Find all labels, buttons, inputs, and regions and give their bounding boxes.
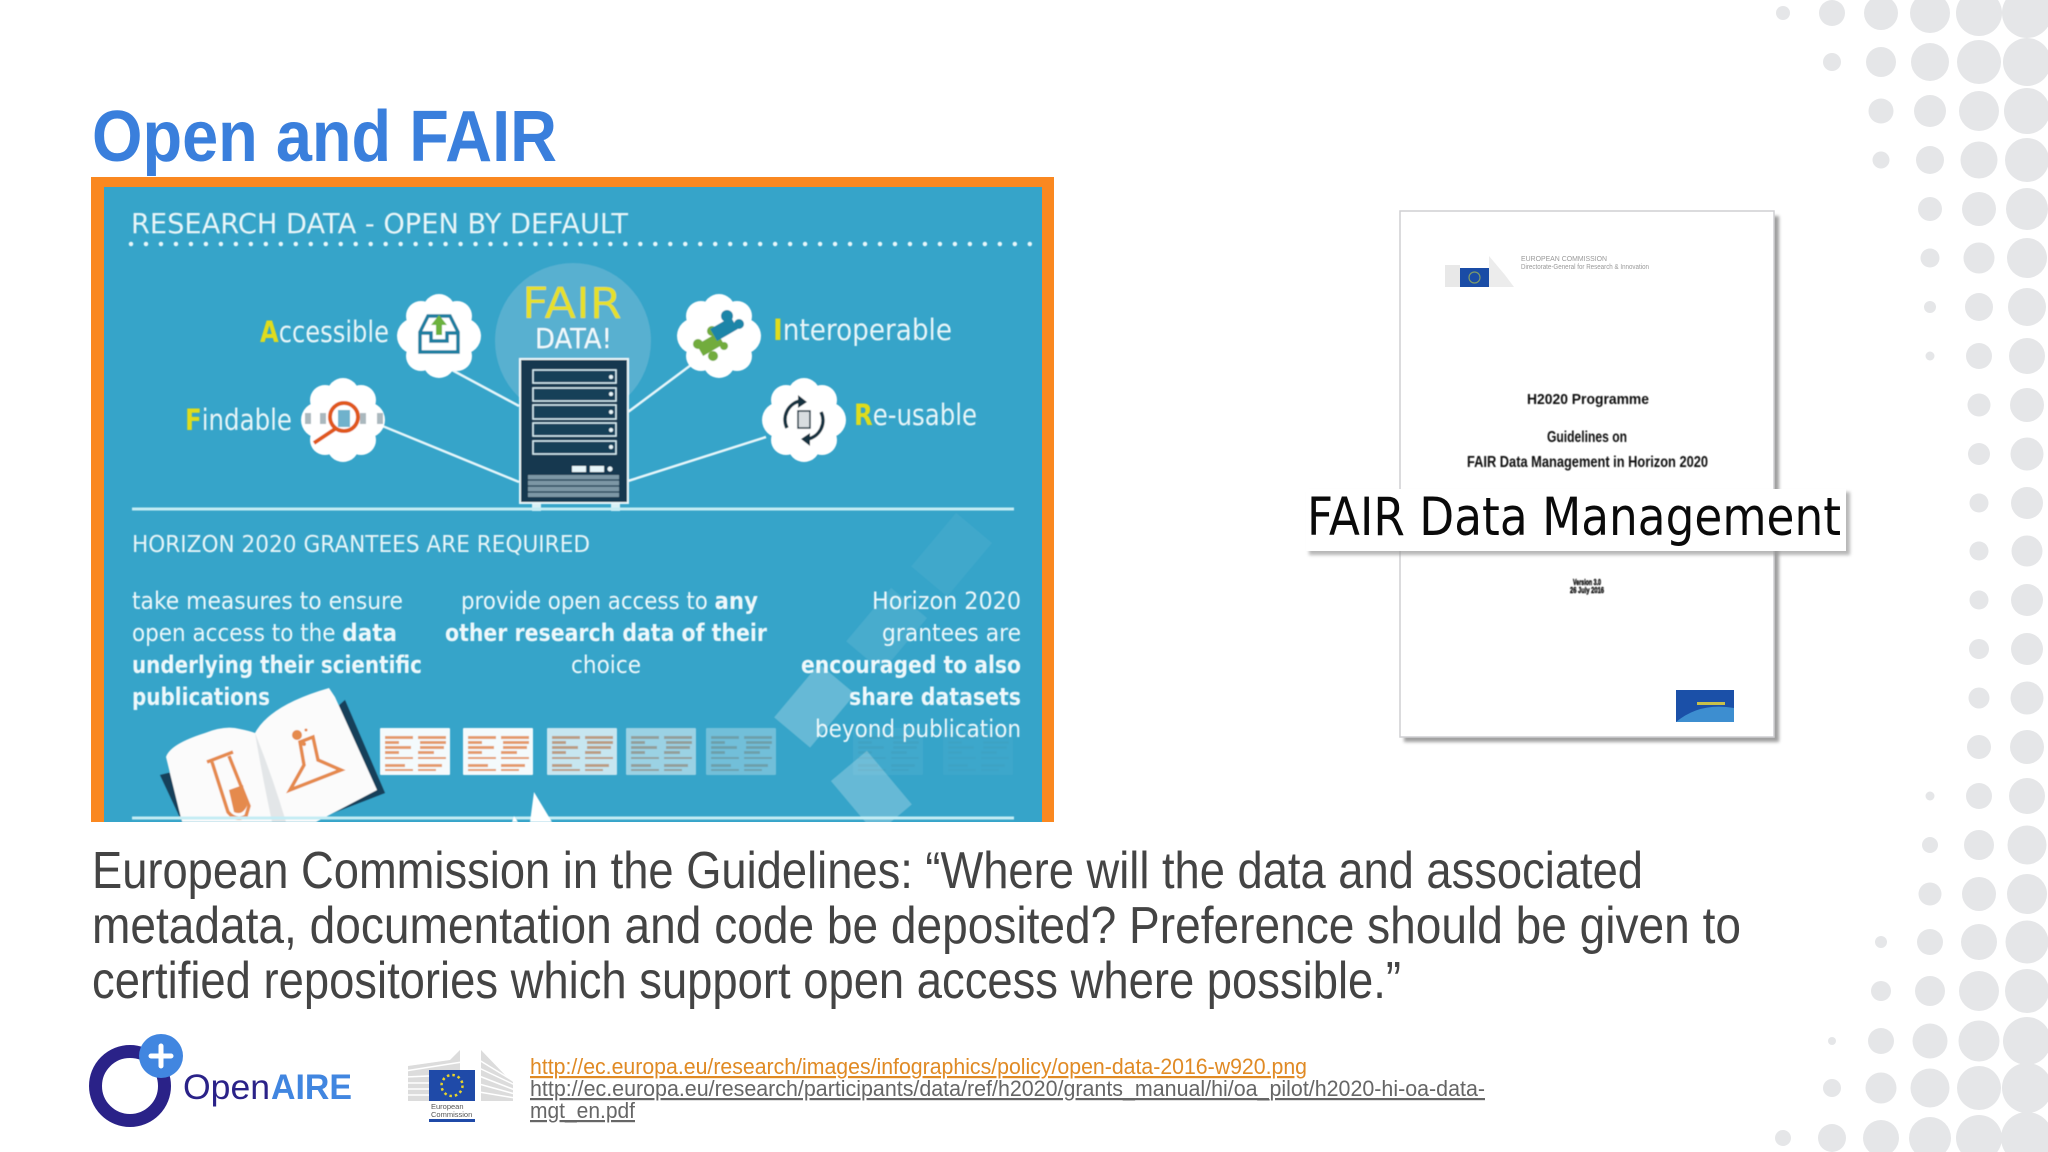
column: other research data: other research data of their xyxy=(445,619,767,647)
column: other research data: provide open access to any xyxy=(461,587,758,615)
logo: European Commission: Commission xyxy=(431,1110,472,1119)
cloud: accessible xyxy=(397,294,481,378)
doc header text xyxy=(1521,256,1649,271)
FAIR glow badge: DATA! xyxy=(535,322,612,355)
quote text block: European Commission in the Guidelines: “Where will the data and associated xyxy=(92,842,1643,900)
source links: mgt_en.pdf xyxy=(530,1098,636,1123)
callout banner: FAIR Data Management: FAIR Data Management xyxy=(1307,487,1841,548)
pointer marker xyxy=(512,792,552,822)
label: Interoperable: Interoperable xyxy=(773,313,952,347)
decorative faded tilted cards xyxy=(774,513,992,835)
logo: OpenAIRE: AIRE xyxy=(271,1068,352,1107)
column: required data: open access to the data xyxy=(132,619,397,647)
FAIR glow badge xyxy=(495,263,651,419)
logo: OpenAIRE: Open xyxy=(183,1068,270,1107)
publication cards xyxy=(380,728,1013,775)
decorative halftone dots xyxy=(1775,0,2048,1152)
doc title text: Guidelines on xyxy=(1547,429,1627,446)
source links: http://ec.europa.eu/research/participants/data/ref/h2020/grants_manual/hi/oa_pilot/h2020-hi-oa-data- xyxy=(530,1076,1485,1101)
cloud: interoperable xyxy=(677,294,761,378)
doc corner image xyxy=(1676,690,1734,722)
label: Findable: Findable xyxy=(185,403,292,437)
doc header text: EUROPEAN COMMISSION xyxy=(1521,256,1607,263)
column: encouraged: encouraged to also xyxy=(801,651,1021,679)
subheading: HORIZON 2020 GRANTEES ARE REQUIRED xyxy=(132,530,590,558)
source links xyxy=(530,1054,1485,1123)
column: other research data xyxy=(445,587,767,679)
column: encouraged: Horizon 2020 xyxy=(872,587,1021,615)
column: encouraged: share datasets xyxy=(849,683,1021,711)
doc title text: H2020 Programme xyxy=(1527,391,1649,408)
mini EC logo xyxy=(1445,256,1514,287)
column: encouraged xyxy=(801,587,1021,743)
panel: guidelines document cover xyxy=(1400,211,1779,742)
quote text block xyxy=(92,842,1741,1010)
cloud: re-usable xyxy=(762,378,846,462)
column: other research data: choice xyxy=(571,651,641,679)
doc header text: Directorate-General for Research & Innovation xyxy=(1521,264,1649,271)
label: Accessible: Accessible xyxy=(260,315,389,349)
doc title text: FAIR Data Management in Horizon 2020 xyxy=(1467,454,1708,471)
label: Re-usable: Re-usable xyxy=(854,398,977,432)
title: Open and FAIR xyxy=(92,97,557,177)
open book icon xyxy=(160,688,385,822)
doc title text: 26 July 2016 xyxy=(1570,585,1604,595)
column: required data xyxy=(132,587,422,711)
logo: European Commission: European xyxy=(431,1102,464,1111)
logo: OpenAIRE xyxy=(96,1034,352,1120)
infographic heading: RESEARCH DATA - OPEN BY DEFAULT xyxy=(131,207,629,240)
column: required data: underlying their scientific xyxy=(132,651,422,679)
logo: European Commission xyxy=(405,1050,515,1122)
FAIR glow badge: FAIR xyxy=(522,279,622,329)
column: encouraged: grantees are xyxy=(882,619,1021,647)
cloud: findable xyxy=(301,378,385,462)
quote text block: certified repositories which support open access where possible.” xyxy=(92,952,1401,1010)
column: encouraged: beyond publication xyxy=(815,715,1021,743)
quote text block: metadata, documentation and code be deposited? Preference should be given to xyxy=(92,897,1741,955)
column: required data: publications xyxy=(132,683,270,711)
doc title text: Version 3.0 xyxy=(1573,577,1601,587)
connector lines xyxy=(380,362,766,482)
panel: FAIR infographic xyxy=(91,177,1054,835)
server rack xyxy=(520,359,628,511)
column: required data: take measures to ensure xyxy=(132,587,403,615)
doc title text xyxy=(1467,391,1708,595)
source links: http://ec.europa.eu/research/images/infographics/policy/open-data-2016-w920.png xyxy=(530,1054,1307,1079)
